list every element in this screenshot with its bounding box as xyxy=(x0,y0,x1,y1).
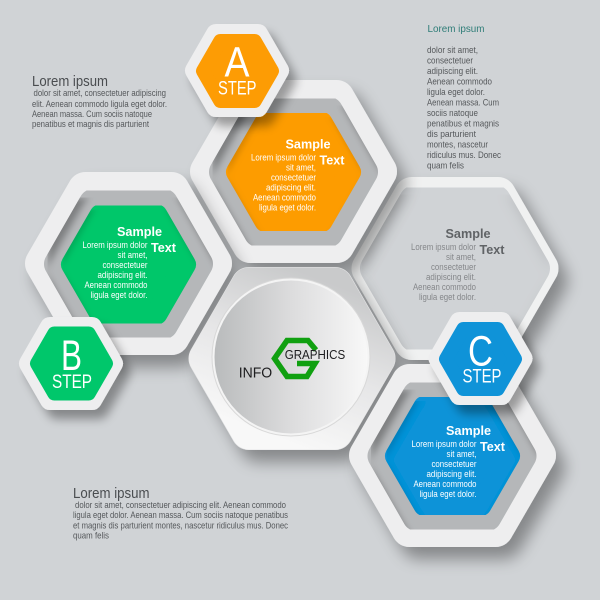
text block: upper right: sociis natoque xyxy=(427,107,478,118)
text: grey sample: sit amet, xyxy=(446,252,476,262)
text: orange sample: ligula eget dolor. xyxy=(259,202,316,212)
text: grey sample: consectetuer xyxy=(431,262,476,272)
icon: G logo xyxy=(274,340,316,376)
text block: bottom left: et magnis dis parturient montes, nascetur ridiculus mus. Donec xyxy=(73,520,288,530)
text block: upper right: montes, nascetur xyxy=(427,138,488,150)
step A badge xyxy=(195,34,279,107)
text: green sample: Text xyxy=(151,240,177,255)
text block: upper right: penatibus et magnis xyxy=(427,118,499,128)
text block: upper left: dolor sit amet, consectetuer adipiscing xyxy=(34,87,166,98)
text: grey sample: Aenean commodo xyxy=(413,282,476,292)
text block: upper left: elit. Aenean commodo ligula eget dolor. xyxy=(32,98,167,109)
text: green sample: ligula eget dolor. xyxy=(90,290,148,300)
text block: upper left: Lorem ipsum xyxy=(32,74,108,90)
text block: upper right: consectetuer xyxy=(427,54,473,66)
text: blue sample: Text xyxy=(480,439,506,454)
text: grey sample: ligula eget dolor. xyxy=(419,292,476,302)
panel: centre hexagon xyxy=(206,278,378,436)
step B badge xyxy=(29,327,113,400)
step C badge: STEP xyxy=(462,366,502,388)
text: green sample: Lorem ipsum dolor xyxy=(82,240,148,250)
panel: grey hexagon xyxy=(370,195,540,342)
text block: bottom left xyxy=(73,486,288,540)
text: orange sample: Sample xyxy=(286,136,330,152)
text: grey sample: adipiscing elit. xyxy=(426,272,476,282)
text: green sample: consectetuer xyxy=(102,260,148,270)
text block: upper right: Aenean massa. Cum xyxy=(427,96,499,108)
text block: upper right: ligula eget dolor. xyxy=(427,86,485,97)
panel: blue hexagon xyxy=(367,382,538,529)
text: green sample: adipiscing elit. xyxy=(98,270,148,280)
text: orange sample: Aenean commodo xyxy=(253,192,316,202)
step A badge: A xyxy=(224,38,250,86)
text: grey sample: Text xyxy=(480,242,505,257)
step C badge xyxy=(438,322,522,395)
text: GRAPHICS: GRAPHICS xyxy=(285,347,345,362)
text block: bottom left: dolor sit amet, consectetuer adipiscing elit. Aenean commodo xyxy=(75,499,286,510)
text block: upper left xyxy=(32,74,167,129)
text block: bottom left: Lorem ipsum xyxy=(73,486,150,502)
step B badge: STEP xyxy=(52,371,92,393)
text: blue sample xyxy=(412,423,506,499)
text: blue sample: sit amet, xyxy=(446,449,476,459)
text: green sample: Sample xyxy=(117,224,162,239)
step C badge: C xyxy=(468,328,493,376)
text block: bottom left: quam felis xyxy=(73,530,109,540)
text block: upper right: ridiculus mus. Donec xyxy=(427,149,501,160)
panel: orange hexagon xyxy=(208,98,379,245)
text block: upper right: Lorem ipsum xyxy=(428,23,485,35)
text: INFO: INFO xyxy=(239,365,272,381)
text: orange sample: adipiscing elit. xyxy=(266,182,316,192)
text: orange sample: sit amet, xyxy=(286,162,316,172)
text: blue sample: Lorem ipsum dolor xyxy=(412,439,477,449)
step B badge: B xyxy=(61,332,82,380)
text block: bottom left: ligula eget dolor. Aenean massa. Cum sociis natoque penatibus xyxy=(73,509,288,520)
text: orange sample: consectetuer xyxy=(271,172,316,182)
text: blue sample: consectetuer xyxy=(432,459,477,469)
text block: upper right: Aenean commodo xyxy=(427,76,492,86)
text: grey sample xyxy=(411,226,505,302)
text block: upper right: dis parturient xyxy=(427,128,476,139)
text: blue sample: ligula eget dolor. xyxy=(420,489,476,499)
text block: upper right xyxy=(427,23,501,170)
text: orange sample: Text xyxy=(320,152,345,168)
text block: upper right: dolor sit amet, xyxy=(427,44,478,55)
step A badge: STEP xyxy=(218,78,256,100)
text block: upper right: adipiscing elit. xyxy=(427,65,478,76)
text: grey sample: Sample xyxy=(446,226,490,241)
text: green sample xyxy=(82,224,177,300)
text: blue sample: Aenean commodo xyxy=(414,479,476,489)
text: blue sample: adipiscing elit. xyxy=(426,469,476,479)
text: green sample: sit amet, xyxy=(118,250,148,260)
text: green sample: Aenean commodo xyxy=(84,280,148,290)
text: orange sample: Lorem ipsum dolor xyxy=(251,152,316,162)
text block: upper left: Aenean massa. Cum sociis natoque xyxy=(32,108,152,119)
text: orange sample xyxy=(251,136,345,212)
panel: green hexagon xyxy=(43,190,214,337)
text block: upper left: penatibus et magnis dis parturient xyxy=(32,118,149,129)
text block: upper right: quam felis xyxy=(427,160,464,170)
text: grey sample: Lorem ipsum dolor xyxy=(411,242,476,252)
text: blue sample: Sample xyxy=(446,423,491,438)
